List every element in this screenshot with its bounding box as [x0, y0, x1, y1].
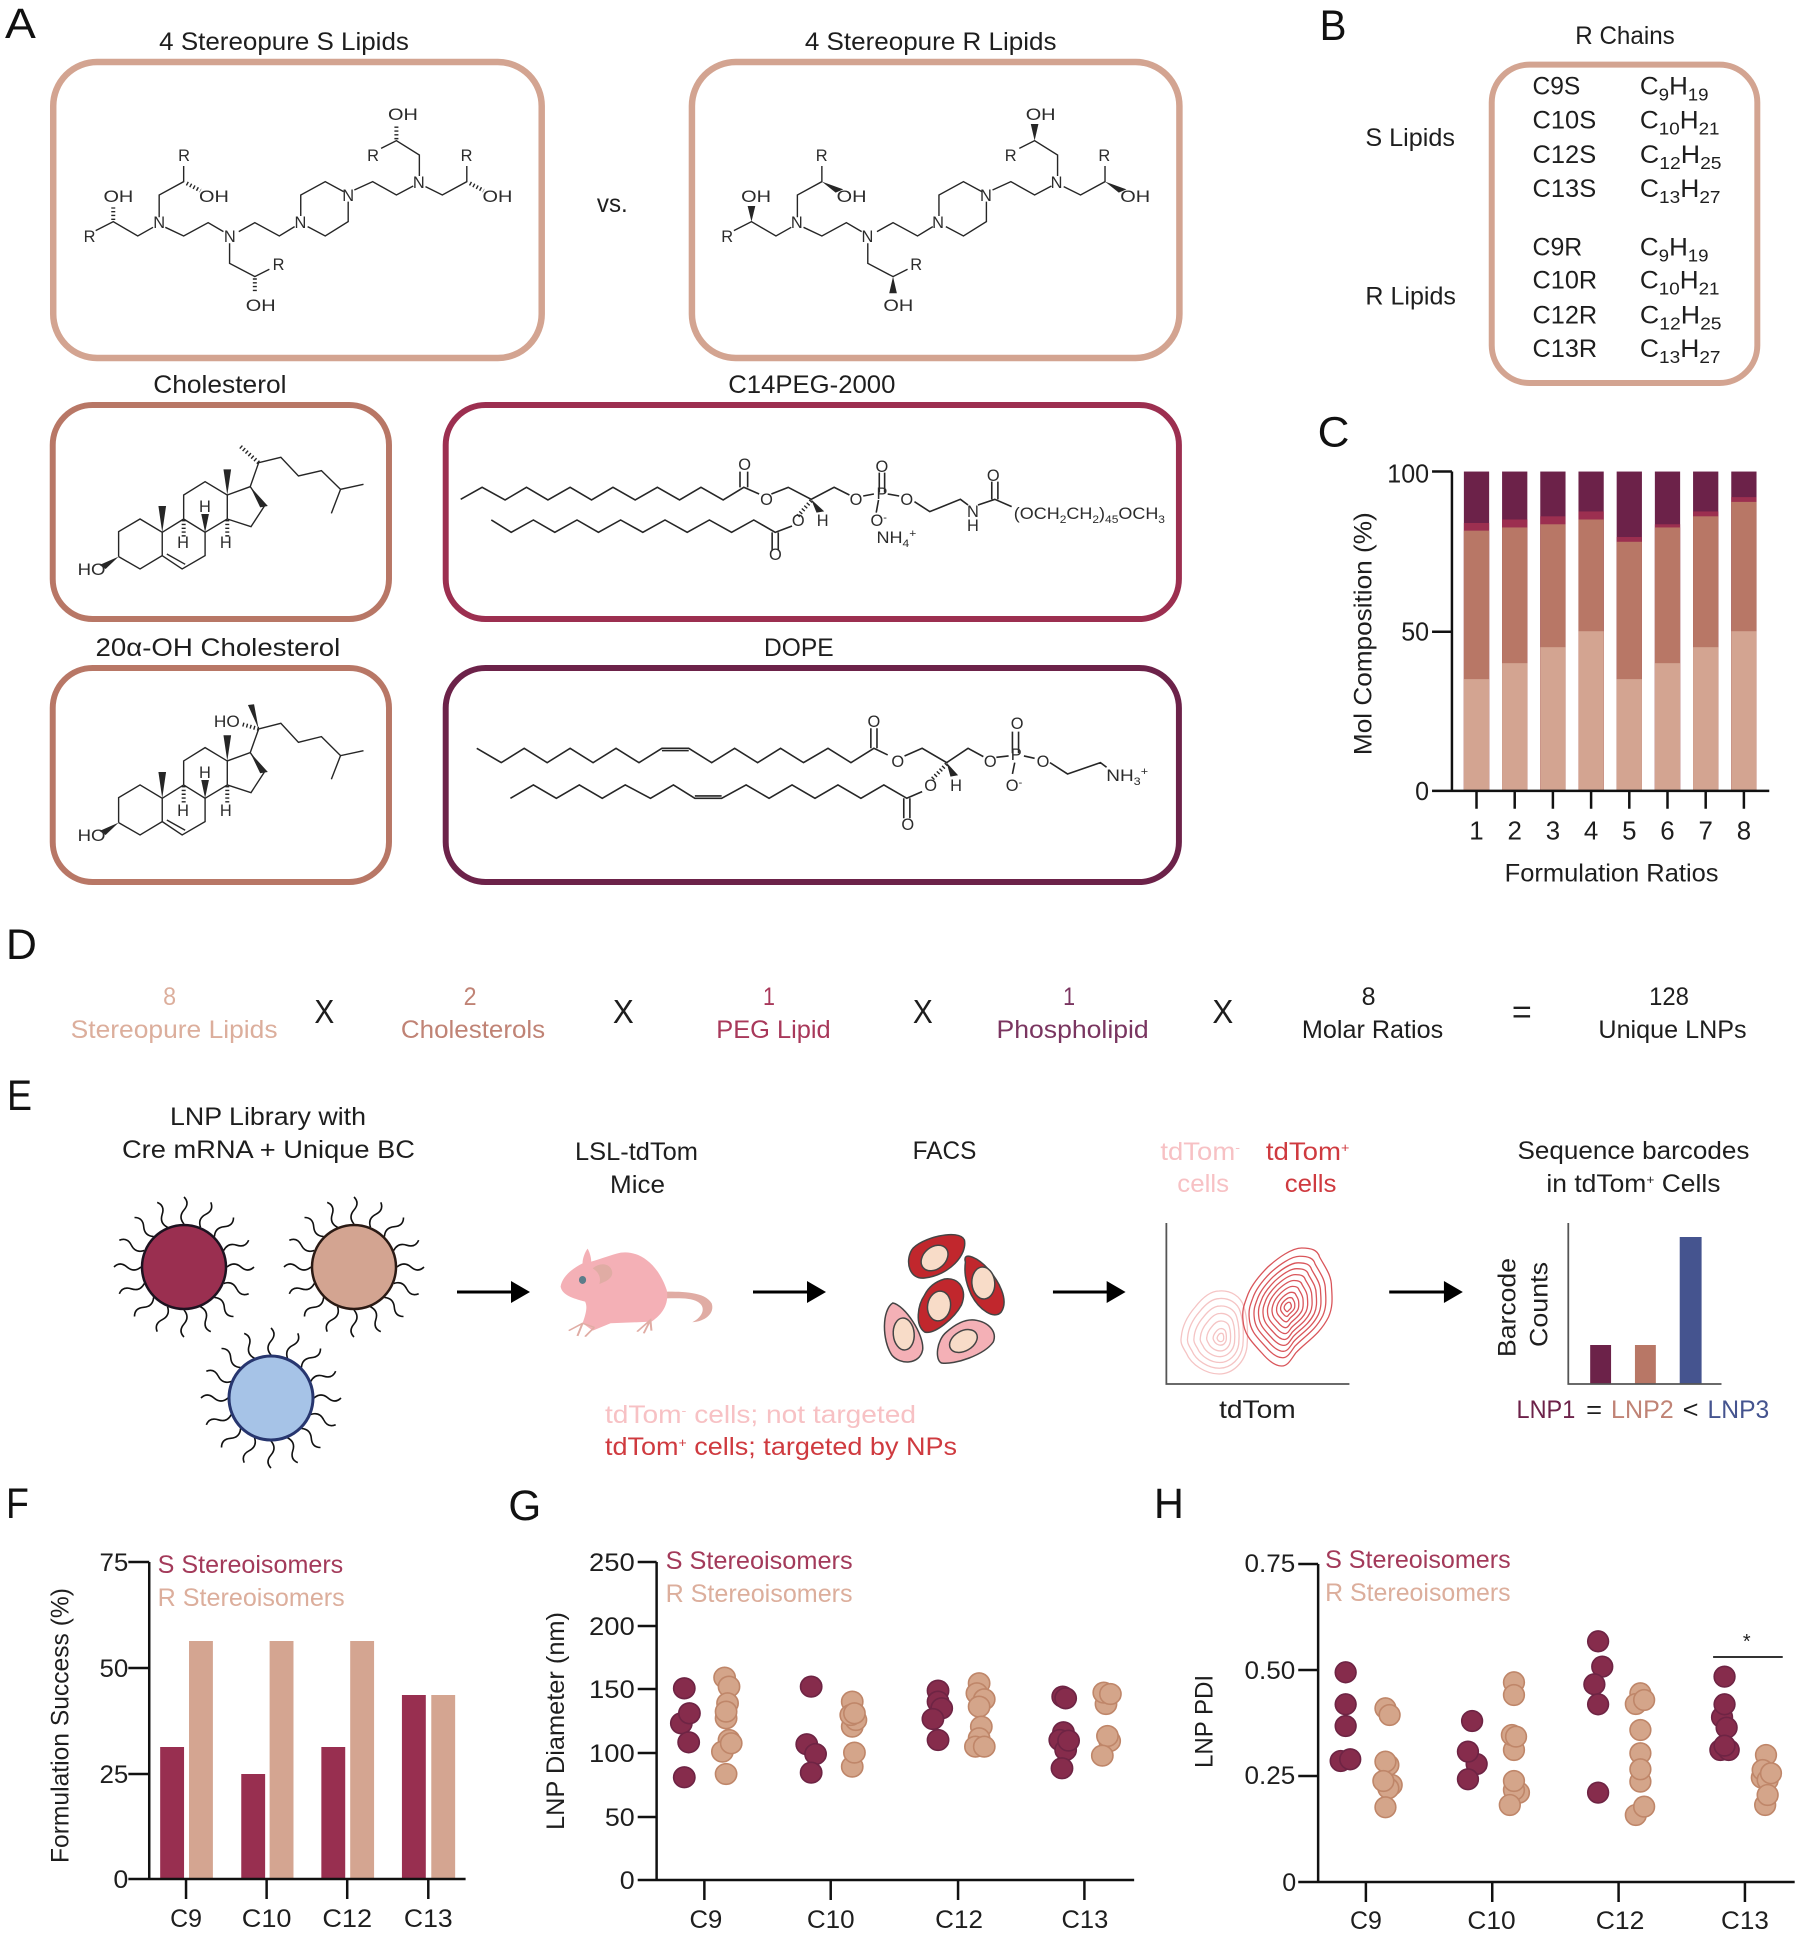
- R lipid atom labels: [721, 106, 1150, 315]
- chain formulas: H: [1669, 234, 1688, 262]
- box: DOPE structure: O: [1011, 715, 1024, 733]
- axes: [1432, 472, 1769, 809]
- heading: tdTom negative cells: [1160, 1138, 1240, 1198]
- legend: S Stereoisomers: [666, 1547, 853, 1575]
- box: C14PEG-2000 structure: O: [792, 512, 805, 530]
- result: unique LNPs: [1598, 983, 1747, 1044]
- arrow 4: [1389, 1281, 1463, 1303]
- heading: 20a-OH Cholesterol: 20α-OH Cholesterol: [96, 634, 340, 662]
- heading: tdTom negative cells: cells: [1177, 1170, 1229, 1198]
- term: cholesterols: [401, 983, 545, 1044]
- box: C14PEG-2000 structure: H: [967, 517, 979, 535]
- y tick labels: 0: [1282, 1869, 1296, 1897]
- arrow 3: [1053, 1281, 1126, 1303]
- caption: targeting legend: -: [682, 1403, 686, 1418]
- axes: [638, 1562, 1134, 1900]
- y axis title: Formulation Success (%): [47, 1588, 75, 1863]
- stacked bars: [1464, 472, 1757, 791]
- box: C14PEG-2000 structure: +: [909, 528, 916, 540]
- R lipid atom labels: R: [721, 228, 733, 246]
- R lipid atom labels: N: [862, 228, 873, 246]
- icon: sorted cells: [884, 1235, 1004, 1363]
- R lipid atom labels: OH: [1026, 106, 1056, 124]
- heading: FACS: FACS: [913, 1137, 976, 1165]
- chart: FACS contour plot: [1166, 1223, 1349, 1384]
- legend: [158, 1551, 345, 1612]
- box: 20a-OH cholesterol structure: H: [220, 802, 232, 820]
- x tick labels: [1350, 1907, 1769, 1935]
- term: molar ratios: [1302, 983, 1443, 1044]
- S lipid atom labels: R: [461, 147, 473, 165]
- box: C14PEG-2000 structure: O: [760, 491, 773, 509]
- heading: LNP library: Cre mRNA + Unique BC: [122, 1136, 415, 1164]
- y tick labels: [1387, 460, 1429, 806]
- result: unique LNPs: 128: [1649, 983, 1689, 1011]
- heading: DOPE: DOPE: [764, 634, 834, 662]
- term: molar ratios: Molar Ratios: [1302, 1016, 1443, 1044]
- chain formulas: H: [1681, 141, 1700, 169]
- caption: targeting legend: +: [679, 1435, 687, 1450]
- box: C14PEG-2000 structure: 45: [1105, 514, 1118, 526]
- y tick labels: 50: [99, 1655, 128, 1683]
- panel letter D: D: [6, 921, 37, 969]
- panel D: library combinatorics equation: [6, 921, 1747, 1044]
- heading: tdTom negative cells: -: [1235, 1140, 1240, 1155]
- R lipid atom labels: OH: [1120, 188, 1150, 206]
- box: C14PEG-2000 structure: 3: [1158, 514, 1165, 526]
- heading: tdTom positive cells: tdTom: [1266, 1138, 1334, 1166]
- y tick labels: 25: [99, 1761, 128, 1789]
- box: 20a-OH cholesterol structure: [53, 668, 389, 882]
- y tick labels: 0: [113, 1866, 128, 1894]
- box: S lipid structure: [53, 62, 542, 358]
- chain names: C9S: [1533, 73, 1580, 101]
- legend: R Stereoisomers: [158, 1584, 345, 1612]
- box: C14PEG-2000 structure: ): [1099, 505, 1105, 523]
- x tick labels: C13: [404, 1905, 453, 1933]
- legend: R Stereoisomers: [666, 1580, 853, 1608]
- caption: targeting legend: tdTom: [605, 1401, 673, 1429]
- chain formulas: 25: [1700, 153, 1722, 173]
- operator x: X: [913, 993, 933, 1030]
- chain formulas: 12: [1659, 153, 1681, 173]
- R lipid atom labels: OH: [837, 188, 867, 206]
- panel F: formulation success bar chart: [6, 1480, 466, 1933]
- panel A: lipid structures: [5, 0, 1179, 882]
- R lipid atom labels: N: [1051, 174, 1062, 192]
- box: C14PEG-2000 structure: (OCH: [1014, 505, 1056, 523]
- R lipid atom labels: N: [791, 214, 803, 232]
- box: C14PEG-2000 structure: 2: [1060, 514, 1066, 526]
- legend: LNP ordering: [1517, 1396, 1769, 1424]
- workflow right half: [884, 1137, 1769, 1424]
- chain formulas: 9: [1659, 84, 1669, 104]
- chain formulas: 21: [1699, 278, 1720, 298]
- scatter points: [1330, 1631, 1781, 1825]
- x tick labels: 4: [1584, 818, 1598, 846]
- x tick labels: [170, 1905, 453, 1933]
- panel G: LNP diameter scatter: [508, 1482, 1134, 1934]
- box: C14PEG-2000 structure: 2: [1092, 514, 1099, 526]
- R lipid atom labels: OH: [883, 297, 913, 315]
- box: cholesterol structure: H: [220, 534, 232, 552]
- box: 20a-OH cholesterol structure: H: [177, 802, 189, 820]
- S lipid atom labels: N: [294, 214, 306, 232]
- S lipid atom labels: N: [342, 187, 354, 205]
- box: C14PEG-2000 structure: O: [769, 546, 782, 564]
- x tick labels: C12: [1596, 1907, 1644, 1935]
- icon: mouse: [561, 1249, 712, 1337]
- arrow 2: [753, 1281, 826, 1303]
- chain formulas: C: [1640, 175, 1658, 203]
- box: C14PEG-2000 structure: -: [883, 512, 887, 524]
- panel letter G: G: [508, 1482, 541, 1530]
- chain formulas: 19: [1688, 84, 1709, 104]
- x tick labels: [1469, 818, 1751, 846]
- box: C14PEG-2000 structure: [446, 405, 1179, 619]
- panel letter C: C: [1318, 409, 1349, 457]
- vs label: vs.: [597, 190, 628, 218]
- box: DOPE structure: O: [1037, 753, 1049, 771]
- R lipid atom labels: N: [932, 214, 944, 232]
- term: molar ratios: 8: [1362, 983, 1376, 1011]
- R lipid atom labels: R: [1005, 147, 1017, 165]
- S lipid atom labels: OH: [246, 297, 276, 315]
- heading: S lipids: 4 Stereopure S Lipids: [159, 28, 409, 56]
- x tick labels: 1: [1469, 818, 1484, 846]
- legend: LNP ordering: LNP1: [1517, 1396, 1575, 1424]
- box: C14PEG-2000 structure: OCH: [1118, 505, 1158, 523]
- chain formulas: 10: [1659, 278, 1680, 298]
- caption: targeting legend: cells; targeted by NPs: [687, 1433, 957, 1461]
- term: PEG lipid: PEG Lipid: [716, 1016, 831, 1044]
- operator x: X: [613, 993, 634, 1030]
- box: C14PEG-2000 structure: O: [738, 456, 751, 474]
- chart: barcode counts: [1494, 1223, 1721, 1384]
- panel letter A: A: [5, 0, 36, 48]
- panel letter B: B: [1320, 2, 1346, 50]
- chain formulas: 9: [1659, 246, 1669, 266]
- term: phospholipid: [997, 983, 1149, 1044]
- legend: S Stereoisomers: [1325, 1546, 1511, 1574]
- y tick labels: 100: [589, 1740, 635, 1768]
- y tick labels: 75: [99, 1549, 128, 1577]
- icon: crimson LNP: [114, 1197, 254, 1337]
- y tick labels: [99, 1549, 128, 1894]
- chain formulas: H: [1680, 266, 1699, 295]
- legend: R Stereoisomers: [1325, 1579, 1511, 1607]
- box: C14PEG-2000 structure: H: [817, 512, 829, 530]
- box: C14PEG-2000 structure: O: [850, 491, 862, 509]
- legend: LNP ordering: LNP2: [1611, 1396, 1674, 1424]
- heading: LNP library: [122, 1103, 415, 1164]
- box: DOPE structure: [446, 668, 1179, 882]
- axes: [128, 1562, 466, 1899]
- heading: R lipids: 4 Stereopure R Lipids: [805, 28, 1057, 56]
- heading: LNP library: LNP Library with: [170, 1103, 366, 1131]
- heading: tdTom negative cells: tdTom: [1160, 1138, 1228, 1166]
- x tick labels: C9: [1350, 1907, 1382, 1935]
- box: 20a-OH cholesterol structure: HO: [214, 713, 240, 731]
- y tick labels: 0.25: [1245, 1762, 1295, 1790]
- box: DOPE structure: O: [924, 777, 937, 795]
- box: 20a-OH cholesterol structure: H: [199, 764, 211, 782]
- chains box: [1492, 65, 1757, 383]
- chain formulas: 21: [1699, 118, 1720, 138]
- term: stereopure lipids: 8: [163, 983, 176, 1011]
- term: phospholipid: Phospholipid: [997, 1016, 1149, 1044]
- axes: [1298, 1564, 1795, 1902]
- term: stereopure lipids: [71, 983, 278, 1044]
- chain formulas: C: [1640, 73, 1658, 101]
- term: cholesterols: Cholesterols: [401, 1016, 545, 1044]
- x tick labels: [689, 1906, 1108, 1934]
- icon: tan LNP: [284, 1197, 424, 1337]
- heading: sequence barcodes: in tdTom: [1546, 1170, 1640, 1198]
- box: DOPE structure: O: [868, 713, 880, 731]
- S lipid atom labels: OH: [199, 188, 229, 206]
- y tick labels: [1245, 1550, 1296, 1897]
- label: R Lipids: R Lipids: [1365, 282, 1456, 310]
- axis label: tdTom: tdTom: [1219, 1396, 1296, 1424]
- box: C14PEG-2000 structure: O: [871, 512, 883, 530]
- heading: sequence barcodes: Sequence barcodes: [1518, 1137, 1749, 1165]
- chain formulas: 19: [1688, 246, 1709, 266]
- x tick labels: 8: [1737, 818, 1751, 846]
- term: PEG lipid: [716, 983, 831, 1044]
- equals sign: =: [1512, 993, 1532, 1030]
- chain names: C13R: [1533, 335, 1597, 363]
- box: R lipid structure: [692, 62, 1179, 358]
- box: C14PEG-2000 structure: 4: [903, 538, 909, 550]
- box: cholesterol structure: H: [177, 534, 189, 552]
- panel B: R chains table: [1320, 2, 1757, 383]
- operator x: X: [1212, 993, 1233, 1030]
- heading: sequence barcodes: +: [1646, 1172, 1654, 1187]
- result: unique LNPs: Unique LNPs: [1598, 1016, 1747, 1044]
- heading: tdTom positive cells: cells: [1285, 1170, 1336, 1198]
- S lipid atom labels: R: [273, 256, 285, 274]
- chain formulas: C: [1640, 335, 1658, 363]
- x tick labels: C13: [1062, 1906, 1108, 1934]
- chain names: C13S: [1533, 175, 1596, 203]
- y tick labels: 150: [589, 1676, 635, 1704]
- legend: [666, 1547, 853, 1608]
- x axis title: Formulation Ratios: [1505, 859, 1719, 887]
- R lipid atom labels: R: [816, 147, 828, 165]
- x tick labels: C9: [689, 1906, 722, 1934]
- significance bar: [1713, 1631, 1783, 1657]
- panel letter E: E: [7, 1072, 32, 1120]
- box: C14PEG-2000 structure: N: [967, 503, 979, 521]
- chain names: C9R: [1533, 234, 1582, 262]
- label: S Lipids: S Lipids: [1365, 124, 1455, 152]
- operator x: X: [314, 993, 334, 1030]
- caption: targeting legend: cells; not targeted: [686, 1401, 916, 1429]
- chain names: [1533, 73, 1597, 363]
- box: C14PEG-2000 structure: O: [875, 458, 888, 476]
- chain names: C10R: [1533, 266, 1597, 295]
- box: DOPE structure: H: [950, 777, 962, 795]
- chain formulas: 13: [1659, 347, 1680, 367]
- term: PEG lipid: 1: [763, 983, 775, 1011]
- chart: barcode counts: Barcode: [1494, 1258, 1522, 1357]
- x tick labels: C10: [807, 1906, 855, 1934]
- scatter points: [671, 1667, 1121, 1788]
- S lipid atom labels: OH: [103, 188, 133, 206]
- box: DOPE structure: O: [901, 816, 914, 834]
- y tick labels: 0.75: [1245, 1550, 1295, 1578]
- y tick labels: 200: [589, 1613, 635, 1641]
- y tick labels: 250: [589, 1549, 635, 1577]
- box: DOPE structure: 3: [1134, 776, 1141, 788]
- chain formulas: 27: [1699, 347, 1721, 367]
- chain formulas: [1640, 73, 1722, 367]
- S lipid atom labels: N: [153, 214, 165, 232]
- chain formulas: C: [1640, 234, 1658, 262]
- box: DOPE structure: -: [1019, 777, 1023, 789]
- x tick labels: C13: [1721, 1907, 1769, 1935]
- box: C14PEG-2000 structure: O: [987, 467, 1000, 485]
- box: C14PEG-2000 structure: O: [900, 491, 913, 509]
- S lipid atom labels: R: [84, 228, 96, 246]
- legend: LNP ordering: =: [1586, 1396, 1602, 1424]
- caption: targeting legend: tdTom: [605, 1433, 673, 1461]
- bars: [160, 1641, 455, 1879]
- legend: S Stereoisomers: [158, 1551, 343, 1579]
- panel D left terms: [6, 921, 831, 1044]
- R lipid atom labels: R: [910, 256, 922, 274]
- chain formulas: 13: [1659, 187, 1680, 207]
- y tick labels: 0: [620, 1867, 635, 1895]
- box: cholesterol structure: [53, 405, 389, 619]
- heading: tdTom positive cells: [1266, 1138, 1349, 1198]
- S lipid atom labels: N: [413, 174, 425, 192]
- x tick labels: 2: [1508, 818, 1522, 846]
- arrow 1: [457, 1281, 530, 1303]
- S lipid atom labels: [84, 106, 512, 315]
- chain formulas: 25: [1700, 313, 1722, 333]
- panel letter F: F: [6, 1480, 29, 1528]
- box: C14PEG-2000 structure: P: [876, 485, 887, 503]
- chain formulas: 10: [1659, 118, 1680, 138]
- y tick labels: 100: [1387, 460, 1429, 488]
- heading: tdTom positive cells: +: [1341, 1140, 1349, 1155]
- legend: LNP ordering: <: [1683, 1396, 1699, 1424]
- R lipid atom labels: N: [980, 187, 992, 205]
- term: phospholipid: 1: [1063, 983, 1075, 1011]
- x tick labels: 3: [1546, 818, 1560, 846]
- panel C: mol composition stacked bar chart: [1318, 409, 1769, 887]
- chain names: C10S: [1533, 106, 1596, 134]
- S lipid atom labels: OH: [388, 106, 418, 124]
- legend: LNP ordering: LNP3: [1708, 1396, 1769, 1424]
- x tick labels: C10: [242, 1905, 291, 1933]
- box: DOPE structure: O: [1006, 777, 1019, 795]
- chart: barcode counts: Counts: [1525, 1262, 1553, 1347]
- chain formulas: H: [1680, 175, 1699, 203]
- R lipid atom labels: OH: [741, 188, 771, 206]
- heading: sequence barcodes: Cells: [1654, 1170, 1721, 1198]
- x tick labels: 7: [1699, 818, 1713, 846]
- significance bar: *: [1743, 1631, 1751, 1653]
- chain formulas: H: [1681, 301, 1700, 329]
- box: DOPE structure: P: [1011, 746, 1022, 764]
- y tick labels: 50: [1401, 619, 1429, 647]
- x tick labels: C10: [1467, 1907, 1516, 1935]
- box: DOPE structure: NH: [1106, 767, 1130, 785]
- chain names: C12R: [1533, 301, 1597, 329]
- chain formulas: 12: [1659, 313, 1681, 333]
- heading: Cholesterol: Cholesterol: [153, 371, 287, 399]
- x tick labels: 5: [1622, 818, 1636, 846]
- S lipid atom labels: R: [178, 147, 190, 165]
- box: 20a-OH cholesterol structure: HO: [78, 827, 105, 845]
- R lipid atom labels: R: [1098, 147, 1110, 165]
- x tick labels: C9: [170, 1905, 202, 1933]
- heading: R Chains: R Chains: [1575, 22, 1675, 50]
- term: cholesterols: 2: [464, 983, 477, 1011]
- heading: mice: LSL-tdTom: [575, 1138, 698, 1166]
- chain formulas: C: [1640, 106, 1658, 134]
- x tick labels: C12: [935, 1906, 983, 1934]
- S lipid atom labels: OH: [483, 188, 512, 206]
- S lipid atom labels: N: [224, 228, 236, 246]
- box: DOPE structure: O: [891, 753, 904, 771]
- box: C14PEG-2000 structure: NH: [876, 529, 900, 547]
- y tick labels: [589, 1549, 635, 1895]
- panel letter H: H: [1154, 1480, 1184, 1528]
- chain formulas: 27: [1699, 187, 1721, 207]
- y tick labels: 0: [1415, 778, 1429, 806]
- chain formulas: H: [1680, 335, 1699, 363]
- heading: C14PEG-2000: C14PEG-2000: [728, 371, 895, 399]
- panel H: LNP PDI scatter: [1154, 1480, 1795, 1935]
- heading: sequence barcodes: [1518, 1137, 1749, 1198]
- term: stereopure lipids: Stereopure Lipids: [71, 1016, 278, 1044]
- y tick labels: 0.50: [1245, 1657, 1295, 1685]
- caption: targeting legend: [605, 1401, 957, 1461]
- box: C14PEG-2000 structure: CH: [1066, 505, 1092, 523]
- x tick labels: C12: [322, 1905, 372, 1933]
- box: cholesterol structure: H: [199, 498, 211, 516]
- chain names: C12S: [1533, 141, 1596, 169]
- panel D right terms: [913, 983, 1747, 1044]
- y axis title: Mol Composition (%): [1349, 512, 1377, 755]
- y tick labels: 50: [605, 1804, 635, 1832]
- box: cholesterol structure: HO: [78, 561, 105, 579]
- chain formulas: H: [1680, 106, 1699, 134]
- chain formulas: C: [1640, 301, 1658, 329]
- heading: mice: Mice: [610, 1171, 665, 1199]
- chain formulas: C: [1640, 266, 1658, 295]
- heading: mice: [575, 1138, 698, 1199]
- S lipid atom labels: R: [367, 147, 379, 165]
- chain formulas: H: [1669, 73, 1688, 101]
- x tick labels: 6: [1660, 818, 1675, 846]
- legend: [1325, 1546, 1511, 1607]
- y axis title: LNP Diameter (nm): [542, 1612, 570, 1830]
- box: DOPE structure: +: [1141, 766, 1148, 778]
- panel E: screening workflow: [7, 1072, 1769, 1468]
- icon: blue LNP: [201, 1328, 341, 1468]
- y axis title: LNP PDI: [1191, 1675, 1219, 1768]
- chain formulas: C: [1640, 141, 1658, 169]
- box: DOPE structure: O: [984, 753, 997, 771]
